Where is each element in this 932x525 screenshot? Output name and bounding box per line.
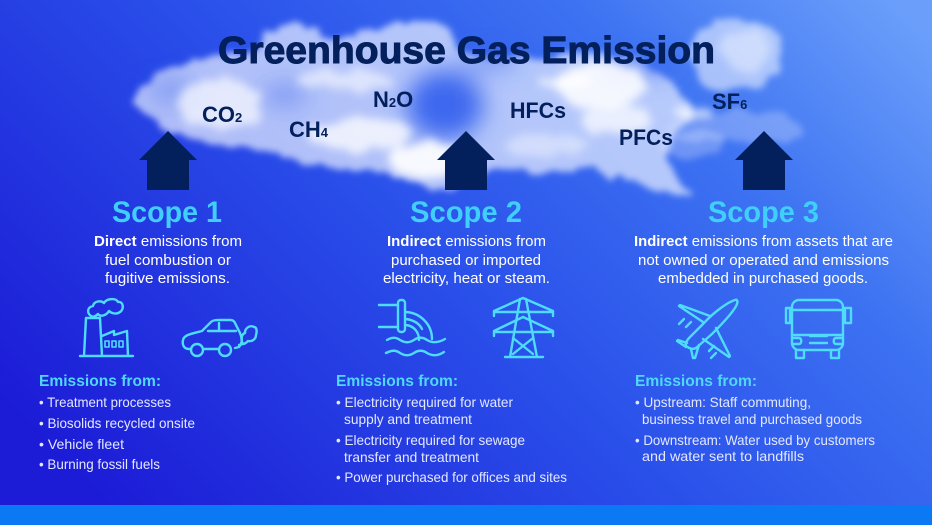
list: scope 3: • Downstream: Water used by customers [635,432,875,448]
list: scope 2: supply and treatment [344,411,472,427]
heading: emissions from: Emissions from: [336,373,458,390]
list: scope 2: • Electricity required for sewage [336,432,525,448]
heading: scope 1: Scope 1 [112,196,222,229]
heading: emissions from: Emissions from: [635,373,757,390]
description: scope 3 [634,233,893,287]
gas: N2O: N2O [373,87,413,112]
description: scope 3: Indirect emissions from assets that are [634,233,893,250]
description: scope 1: fuel combustion or [105,252,231,269]
blue gaps in cloud [148,50,680,139]
gas: PFCs: PFCs [619,125,673,150]
description: scope 3: embedded in purchased goods. [658,270,868,287]
icon: airplane [677,300,737,358]
list: scope 3: • Upstream: Staff commuting, [635,394,811,410]
bottom strip [0,505,932,525]
list: scope 1: • Vehicle fleet [39,436,124,452]
heading: scope 2: Scope 2 [410,196,522,229]
description: scope 3: not owned or operated and emissions [638,252,889,269]
cloud [135,20,801,195]
gas: SF6: SF6 [712,89,747,114]
heading: emissions from: Emissions from: [39,373,161,390]
list: scope 2: • Electricity required for water [336,394,513,410]
arrow: scope 3 [735,131,793,190]
description: scope 2: purchased or imported [391,252,541,269]
description: scope 1: fugitive emissions. [105,270,230,287]
description: scope 1: Direct emissions from [94,233,242,250]
panel: scope 3 [634,196,893,464]
arrow: scope 1 [139,131,197,190]
list: scope 2: • Power purchased for offices and sites [336,469,567,485]
list: scope 3: business travel and purchased goods [642,411,862,427]
list: scope 1: • Biosolids recycled onsite [39,415,195,431]
icon: bus [786,300,851,358]
title: Greenhouse Gas Emission [218,30,715,72]
list: scope 1: • Treatment processes [39,394,171,410]
panel: scope 2 [336,196,567,485]
list: scope 1 [39,394,195,472]
icon: pylon [494,298,553,357]
gas: HFCs: HFCs [510,98,566,123]
list: scope 3 [635,394,875,464]
gas labels [202,87,747,150]
description: scope 1 [94,233,242,287]
panel: scope 1 [39,196,257,472]
heading: scope 3: Scope 3 [708,196,819,229]
gas: CO2: CO2 [202,102,242,127]
icon: car [183,320,257,356]
gas: CH4: CH4 [289,117,329,142]
list: scope 1: • Burning fossil fuels [39,456,160,472]
list: scope 2 [336,394,567,485]
list: scope 3: and water sent to landfills [642,448,804,464]
description: scope 2: electricity, heat or steam. [383,270,550,287]
description: scope 2: Indirect emissions from [387,233,546,250]
icon: factory [80,299,133,356]
list: scope 2: transfer and treatment [344,449,479,465]
icon: outfall pipe [379,300,445,355]
arrow: scope 2 [437,131,495,190]
description: scope 2 [383,233,550,287]
